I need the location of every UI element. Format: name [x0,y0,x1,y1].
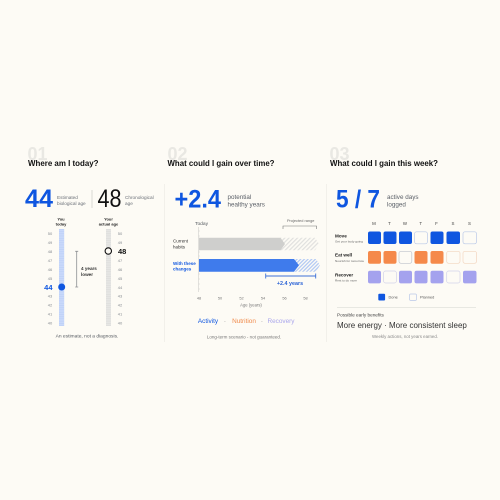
stat: biological age: 44 [25,185,53,213]
gauge: actual age scale: 40 [118,321,123,326]
panel: gain this week [330,144,476,339]
chart: healthy years scenarios: changes [173,267,192,272]
legend: activity nutrition recovery: Activity [198,318,219,325]
section number 01: 01 [28,144,48,164]
gauge: biological age scale: 40 [48,321,53,326]
gauge: actual age scale: 47 [118,258,123,263]
stat: biological age [25,185,86,213]
stat: biological age: biological age [57,201,86,206]
legend: activity nutrition recovery [198,318,295,325]
gauge: actual age scale: 46 [118,267,123,272]
heading: gain this week: What could I gain this week? [330,158,438,168]
caption: long-term scenario: Long-term scenario - not guaranteed. [207,335,281,340]
benefits block: More energy · More consistent sleep [337,321,467,330]
legend: done and planned: Done [388,295,398,300]
stat: healthy years: +2.4 [174,186,221,214]
chart: healthy years scenarios: 50 [218,295,223,300]
stat: active days [336,186,418,214]
stat: biological age: Estimated [57,195,78,200]
legend: activity nutrition recovery: Nutrition [232,318,256,325]
column label: you today: today [56,221,67,226]
chart: healthy years scenarios: Current [173,238,189,244]
chart: healthy years scenarios: With these [173,261,196,266]
gauge: biological age scale: 46 [48,267,53,272]
legend: activity nutrition recovery: · [224,318,226,325]
stat: chronological age: Chronological [125,195,154,200]
stat: active days: logged [387,201,406,208]
caption: weekly actions: Weekly actions, not years earned. [372,334,438,339]
habit row: recover [335,271,476,283]
weekday labels: S [468,221,471,226]
chart: healthy years scenarios: Projected range [287,218,314,223]
weekday labels: T [388,221,391,226]
gauge: biological age scale: 44 [44,283,53,292]
bracket: 4 years lower: 4 years [81,266,97,271]
benefits block: Possible early benefits [337,312,385,318]
gauge: actual age scale [105,229,126,326]
stat: active days: 5 / 7 [336,186,380,214]
habit row: move: Move [335,233,347,238]
gauge: biological age scale: 45 [48,276,53,281]
gauge: actual age scale: 50 [118,231,123,236]
bracket: 4 years lower: lower [81,272,93,277]
habit row: recover: Rest to do more [335,278,357,282]
gauge: actual age scale: 42 [118,303,123,308]
heading: where am I today: Where am I today? [28,158,98,168]
legend: done and planned [378,294,434,300]
habit row: eat well: Eat well [335,253,352,258]
legend: activity nutrition recovery: · [261,318,263,325]
chart: healthy years scenarios: 58 [303,295,308,300]
gauge: biological age scale: 49 [48,240,53,245]
stat: active days: active days [387,194,418,201]
gauge: actual age scale: 43 [118,294,123,299]
panel: where am I today [25,144,154,340]
section number 03: 03 [330,144,350,164]
chart: healthy years scenarios: 54 [261,295,266,300]
weekday labels: W [403,221,408,226]
gauge: biological age scale: 47 [48,258,53,263]
chart: healthy years scenarios: habits [173,244,186,250]
column label: you today: You [57,216,65,222]
stat: healthy years: potential [228,194,251,201]
habit row: recover: Recover [335,273,353,278]
chart: healthy years scenarios: 48 [197,295,201,300]
habit row: eat well: Nourish for tomorrow [335,259,365,263]
column label: your actual age: actual age [99,221,119,226]
stat: chronological age: age [125,201,133,206]
gauge: actual age scale: 48 [118,247,126,256]
gauge: actual age scale: 41 [118,312,123,317]
stat: healthy years: healthy years [228,201,265,208]
section number 02: 02 [168,144,188,164]
stat: chronological age [98,185,154,213]
habit row: eat well [335,251,476,264]
chart: healthy years scenarios: Age (years) [240,302,262,308]
stat: chronological age: 48 [98,185,122,213]
gauge: biological age scale: 42 [48,303,53,308]
chart: healthy years scenarios: Today [195,221,209,227]
column label: your actual age: Your [104,216,113,222]
legend: done and planned: Planned [420,295,434,300]
heading: gain over time: What could I gain over time? [168,158,274,168]
weekday labels [372,221,471,226]
chart: healthy years scenarios [173,218,320,308]
gauge: actual age scale: 45 [118,276,123,281]
legend: activity nutrition recovery: Recovery [268,318,295,325]
gauge: biological age scale [44,229,65,326]
gauge: actual age scale: 49 [118,240,123,245]
chart: healthy years scenarios: 52 [239,295,244,300]
gauge: biological age scale: 43 [48,294,53,299]
habit row: move: Get your body going [335,240,363,244]
weekday labels: M [372,221,376,226]
caption: estimate: An estimate, not a diagnosis. [56,334,118,340]
weekday labels: F [435,221,438,226]
benefits block [337,312,467,330]
chart: healthy years scenarios: 56 [282,295,287,300]
weekday labels: S [452,221,455,226]
stat: healthy years [174,186,265,214]
panel: gain over time [168,144,320,340]
gauge: biological age scale: 50 [48,231,53,236]
weekday labels: T [419,221,422,226]
gauge: biological age scale: 41 [48,312,53,317]
gauge: actual age scale: 44 [118,285,123,290]
gauge: biological age scale: 48 [48,249,53,254]
habit row: move [335,232,476,244]
chart: healthy years scenarios: +2.4 years [277,281,303,287]
bracket: 4 years lower [75,251,97,287]
